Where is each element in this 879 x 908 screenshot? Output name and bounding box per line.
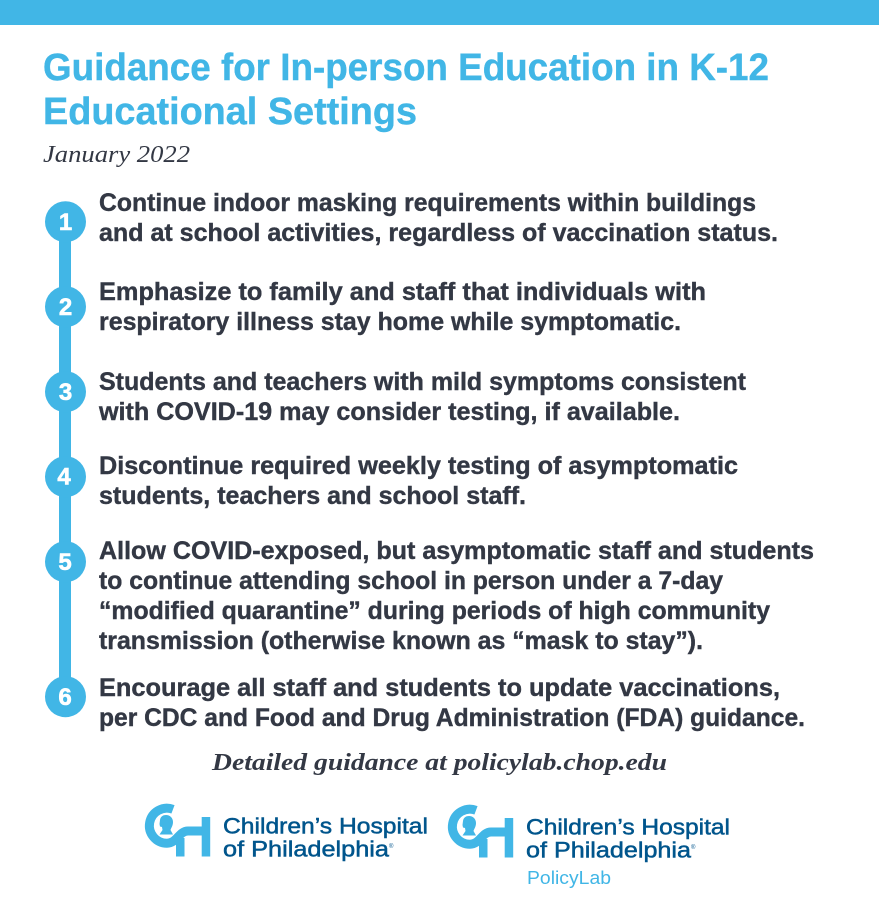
step 4 text: Discontinue required weekly testing of asymptomatic: [99, 452, 738, 480]
logo wordmark: [526, 814, 730, 862]
step 6 marker: 6: [58, 684, 72, 711]
step 5 text: “modified quarantine” during periods of high community: [99, 597, 770, 625]
icon: CH mark: [452, 809, 513, 858]
PolicyLab label: PolicyLab: [527, 868, 611, 888]
step 3 text: [98, 368, 747, 426]
step 5 text: [99, 537, 814, 655]
logo: Children's Hospital of Philadelphia: [149, 808, 428, 862]
title: Educational Settings: [43, 91, 417, 133]
step 4 marker: [45, 456, 86, 497]
date: January 2022: [43, 142, 190, 168]
title: [43, 47, 769, 133]
step 4 marker: 4: [57, 464, 71, 490]
top banner: [0, 0, 879, 25]
logo wordmark: of Philadelphia: [526, 838, 692, 862]
step 3 marker: [45, 371, 86, 412]
logo wordmark: ®: [691, 844, 696, 851]
step 5 marker: [45, 541, 86, 582]
logo wordmark: ®: [389, 843, 394, 850]
step 1 text: Continue indoor masking requirements within buildings: [99, 189, 756, 217]
step 1 text: and at school activities, regardless of vaccination status.: [99, 219, 778, 247]
detailed guidance link: Detailed guidance at policylab.chop.edu: [211, 750, 667, 776]
step 2 text: respiratory illness stay home while symptomatic.: [99, 308, 681, 336]
step 5 marker: 5: [58, 549, 72, 576]
step 3 text: with COVID-19 may consider testing, if available.: [98, 398, 680, 426]
step 3 text: Students and teachers with mild symptoms consistent: [99, 368, 747, 396]
logo wordmark: [223, 814, 428, 862]
step 6 text: [99, 674, 805, 732]
step 1 marker: 1: [59, 209, 72, 236]
step 6 marker: [45, 676, 86, 717]
timeline: [45, 201, 86, 717]
step 4 text: students, teachers and school staff.: [99, 482, 526, 510]
step 2 marker: 2: [59, 294, 72, 321]
step 6 text: per CDC and Food and Drug Administration (FDA) guidance.: [99, 704, 805, 732]
step 2 text: [99, 278, 706, 336]
icon: CH mark: [149, 808, 210, 856]
step 5 text: to continue attending school in person under a 7-day: [99, 567, 723, 595]
logo wordmark: Children’s Hospital: [223, 814, 428, 838]
step 1 marker: [45, 201, 86, 242]
step 4 text: [99, 452, 738, 510]
step 6 text: Encourage all staff and students to update vaccinations,: [99, 674, 780, 702]
logo: PolicyLab: [452, 809, 730, 888]
step 3 marker: 3: [59, 379, 72, 406]
step 2 text: Emphasize to family and staff that individuals with: [99, 278, 706, 306]
step 5 text: Allow COVID-exposed, but asymptomatic staff and students: [99, 537, 814, 565]
title: Guidance for In-person Education in K-12: [43, 47, 769, 89]
step 2 marker: [45, 286, 86, 327]
logo wordmark: of Philadelphia: [223, 836, 390, 862]
step 1 text: [99, 189, 778, 247]
step 5 text: transmission (otherwise known as “mask to stay”).: [99, 627, 703, 655]
logo wordmark: Children’s Hospital: [526, 814, 730, 840]
